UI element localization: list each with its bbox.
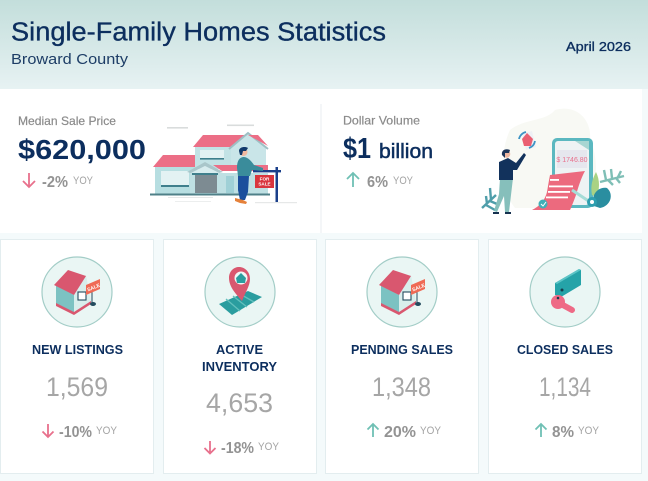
icon: house for sale: SALE: [87, 283, 102, 293]
panel: headline metrics: [0, 89, 642, 233]
card title: NEW LISTINGS: [32, 342, 123, 357]
arrow: down: [42, 424, 54, 437]
icon: map pin: [205, 257, 275, 327]
card title line 1: ACTIVE: [216, 342, 263, 357]
illustration: house for sale: [150, 124, 297, 204]
arrow: up: [368, 424, 378, 437]
card value: 1,569: [46, 372, 108, 402]
icon: house for sale: [367, 257, 437, 327]
dollar volume label: Dollar Volume: [343, 114, 420, 128]
title: Single-Family Homes Statistics: [11, 18, 386, 46]
yoy label: YOY: [258, 441, 280, 453]
man: [235, 147, 263, 204]
card value: 1,348: [372, 372, 431, 402]
metric: median sale price: [18, 114, 146, 191]
yoy label: YOY: [420, 425, 442, 437]
illustration: man with phone and receipt: $ 1746.80: [556, 157, 588, 164]
header band: [0, 0, 648, 89]
arrow: down: [23, 173, 35, 187]
sign: [253, 167, 281, 202]
subtitle: Broward County: [11, 51, 129, 68]
card value: 4,653: [206, 388, 273, 418]
card value: 1,134: [539, 372, 591, 402]
yoy label: YOY: [578, 425, 600, 437]
icon: house for sale: [42, 257, 112, 327]
card title line 2: INVENTORY: [202, 359, 277, 374]
icon: house for sale: SALE: [412, 283, 427, 293]
house badge: [519, 131, 536, 150]
panel: closed sales: [488, 240, 642, 474]
yoy label: YOY: [393, 175, 414, 187]
panel: active inventory: [164, 240, 316, 474]
metric: dollar volume: [343, 114, 433, 191]
card title: CLOSED SALES: [517, 342, 613, 357]
sign: FOR: [260, 176, 270, 182]
change: 20%: [384, 424, 416, 441]
icon: key with tag: [530, 257, 600, 327]
change: -18%: [221, 440, 254, 457]
dollar volume number: $1: [343, 133, 371, 165]
median sale price label: Median Sale Price: [18, 114, 116, 128]
dollar volume change: 6%: [367, 174, 388, 191]
illustration: man with phone and receipt: [482, 109, 624, 214]
change: -10%: [59, 424, 92, 441]
yoy label: YOY: [96, 425, 118, 437]
arrow: up: [536, 424, 546, 437]
man: [493, 149, 526, 214]
panel: new listings: [0, 240, 154, 474]
median sale price value: $620,000: [18, 134, 146, 165]
sign: SALE: [258, 182, 271, 186]
panel: pending sales: [326, 240, 478, 474]
card title: PENDING SALES: [351, 342, 453, 357]
change: 8%: [552, 424, 574, 441]
median price change: -2%: [42, 174, 68, 191]
yoy label: YOY: [73, 175, 94, 187]
date: April 2026: [566, 39, 631, 54]
arrow: down: [204, 441, 216, 454]
dollar volume unit: billion: [379, 141, 433, 163]
arrow: up: [347, 173, 359, 187]
